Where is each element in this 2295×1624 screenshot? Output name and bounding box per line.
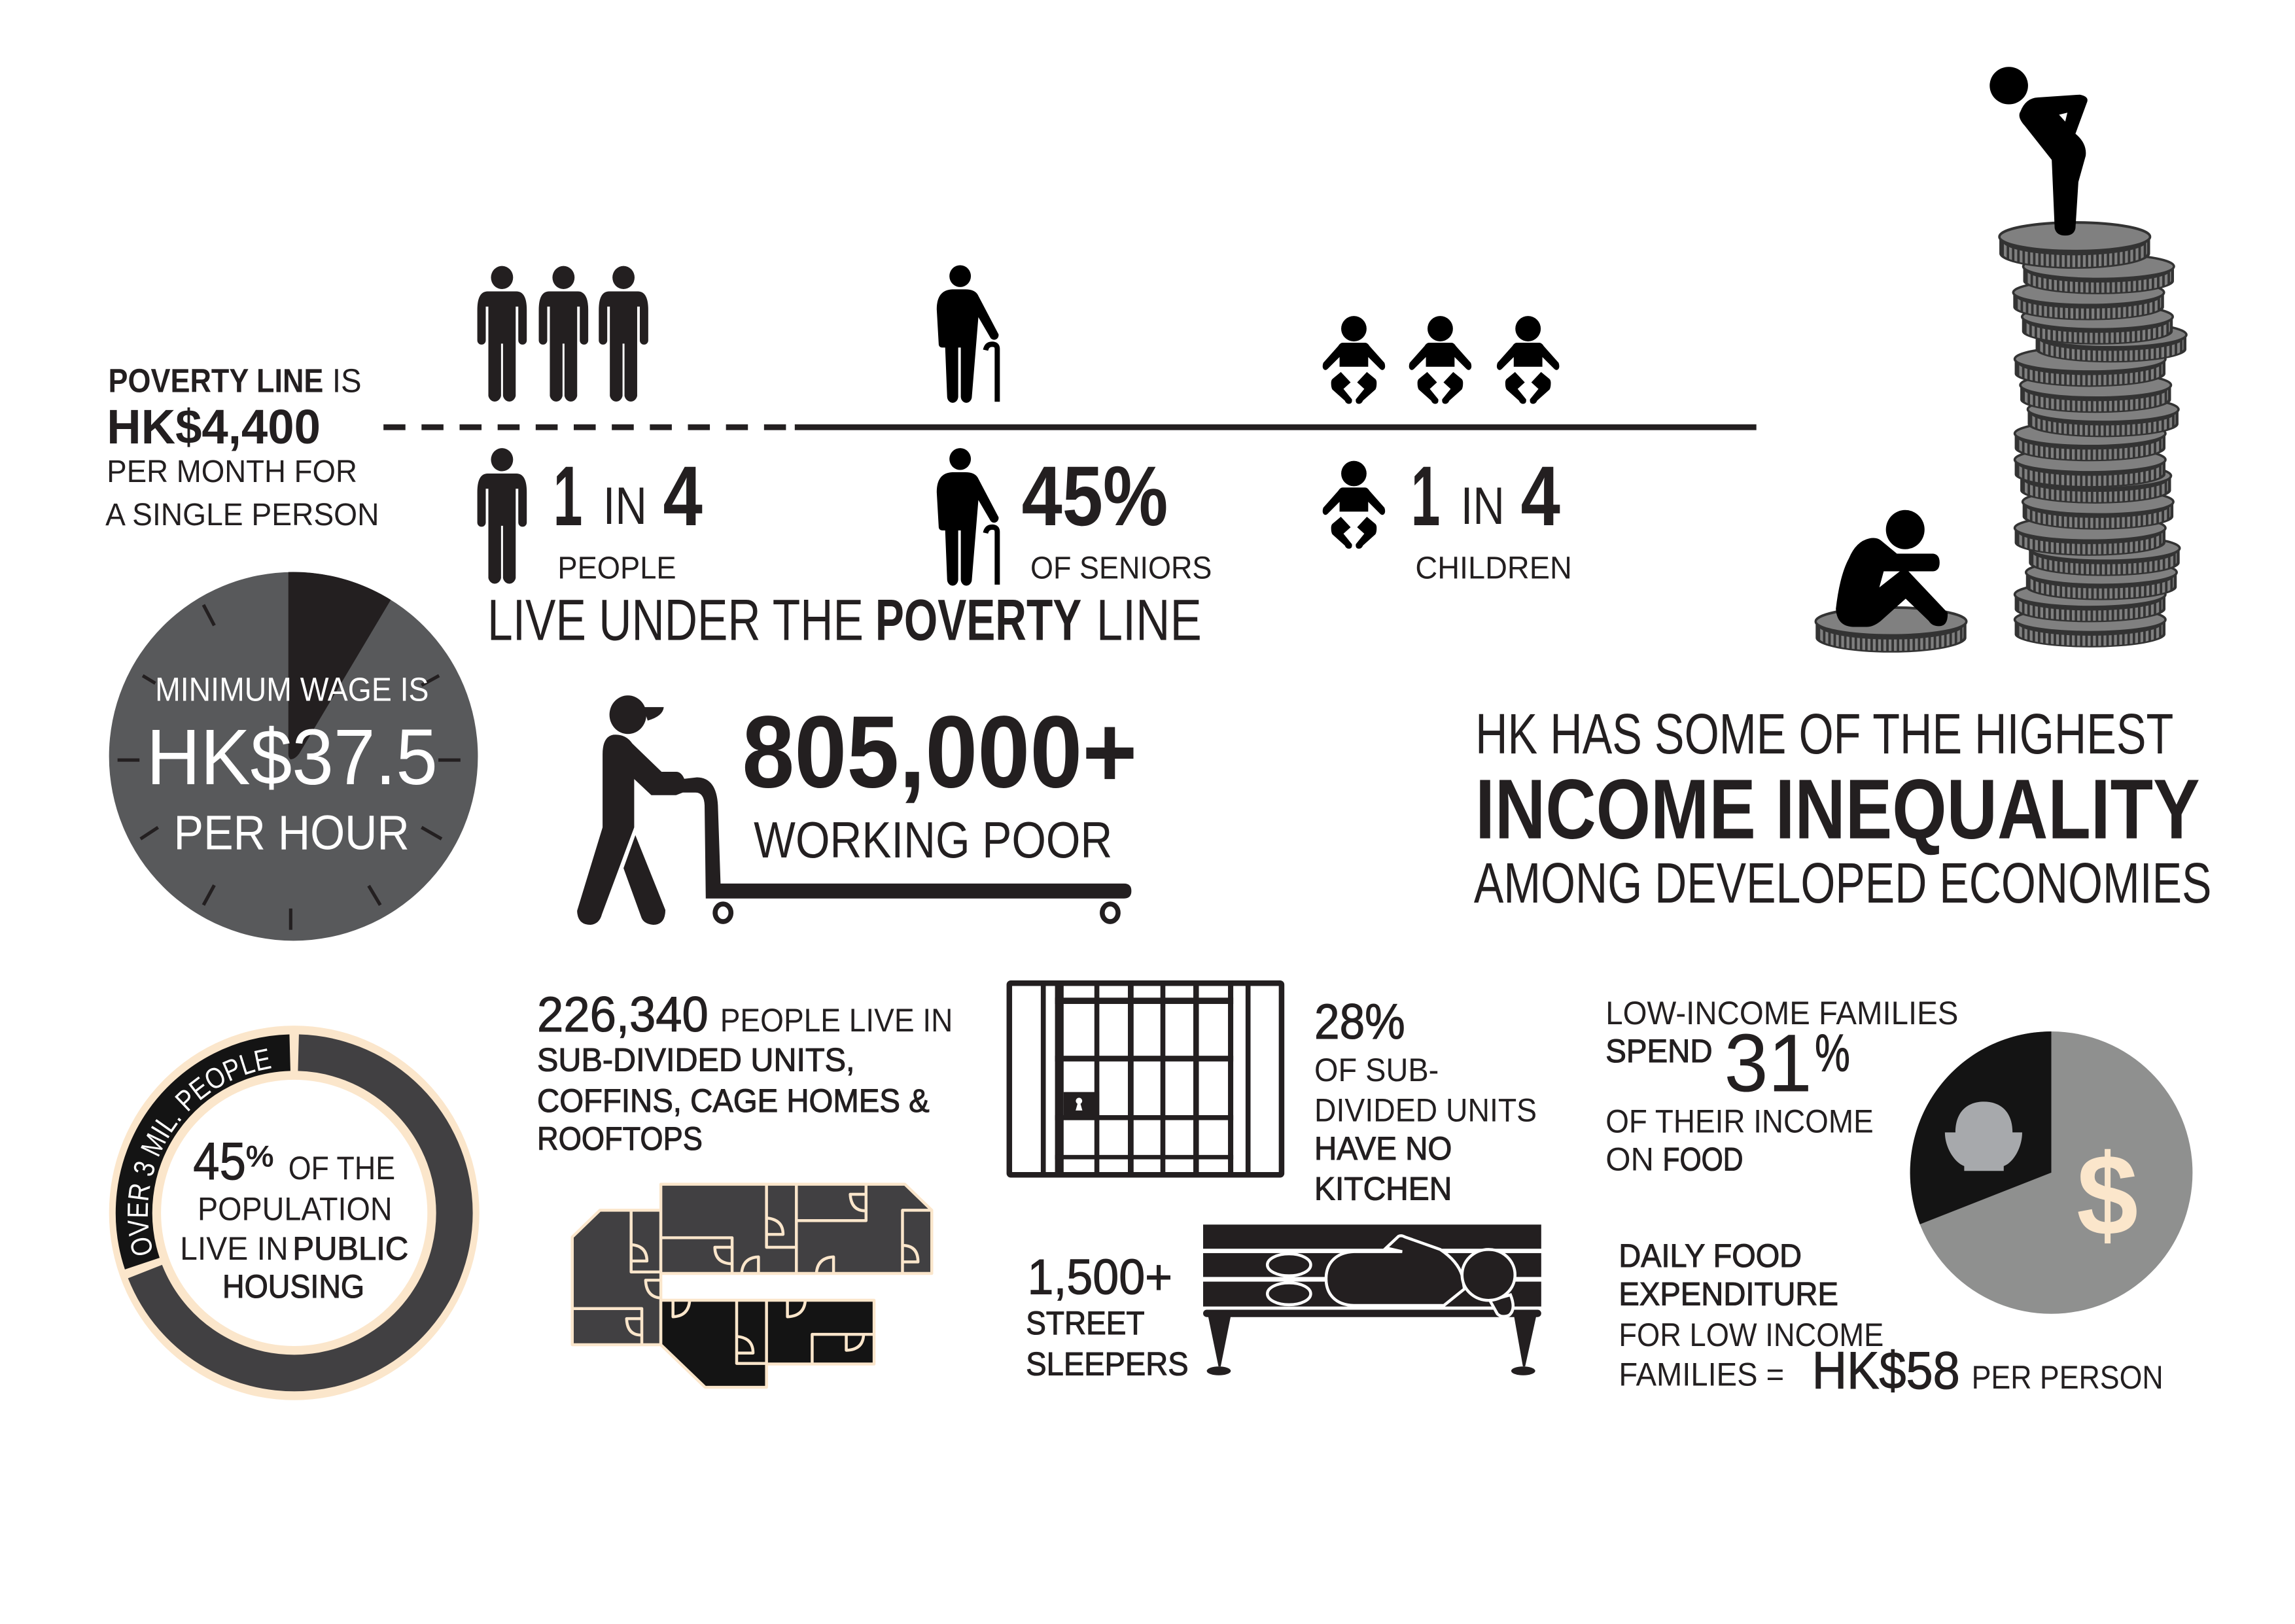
- pie chart: food share of income: [1910, 1031, 2192, 1314]
- text: share of income spent on food: LOW-INCOME FAMILIES: [1605, 994, 1958, 1031]
- text: street sleepers statistic: STREET: [1026, 1304, 1145, 1341]
- icon: three babies above the line: [1323, 316, 1559, 404]
- text: no kitchen statistic: KITCHEN: [1314, 1169, 1452, 1207]
- donut chart: public housing: 45: [193, 1132, 246, 1191]
- text: share of income spent on food: ON: [1605, 1141, 1654, 1178]
- text: no kitchen statistic: OF SUB-: [1314, 1051, 1439, 1088]
- statistic: 1 in 4 children: IN: [1461, 477, 1505, 536]
- donut chart: public housing: [109, 1026, 480, 1400]
- text: share of income spent on food: %: [1815, 1024, 1850, 1082]
- donut chart: public housing: OVER 3 MIL. PEOPLE: [128, 1048, 272, 1255]
- text: sub-divided units statistic: PEOPLE LIVE IN: [720, 1001, 953, 1039]
- statistic: 45% of seniors: 45%: [1022, 449, 1168, 544]
- donut chart: public housing: %: [246, 1140, 273, 1173]
- statistic: 1 in 4 children: CHILDREN: [1415, 551, 1572, 586]
- text: share of income spent on food: 31: [1724, 1018, 1812, 1109]
- clock: minimum wage: HK$37.5: [147, 713, 438, 801]
- text: no kitchen statistic: DIVIDED UNITS: [1314, 1092, 1537, 1129]
- text: daily food expenditure: FAMILIES =: [1619, 1355, 1784, 1392]
- floor plan: sub-divided flat: [572, 1184, 932, 1387]
- icon: person sleeping on a bench: [1203, 1224, 1541, 1375]
- text: no kitchen statistic: HAVE NO: [1314, 1130, 1452, 1167]
- donut chart: public housing: PUBLIC: [292, 1230, 408, 1267]
- text: sub-divided units statistic: SUB-DIVIDED UNITS,: [537, 1041, 855, 1078]
- statistic: 1 in 4 children: [1323, 449, 1572, 586]
- heading: live under the poverty line: LINE: [1096, 587, 1202, 653]
- text: daily food expenditure: HK$58: [1812, 1341, 1960, 1400]
- statistic: 1 in 4 people: IN: [603, 477, 647, 536]
- poverty line threshold text: [105, 362, 379, 532]
- clock: minimum wage: [109, 572, 478, 941]
- heading: live under the poverty line: [487, 587, 1202, 653]
- text: street sleepers statistic: SLEEPERS: [1026, 1345, 1189, 1383]
- text: no kitchen statistic: [1314, 994, 1537, 1207]
- icon: worker pushing a cart: [577, 695, 1131, 925]
- statistic: working poor: 805,000+: [742, 695, 1137, 809]
- illustration: single coin with poor figure: [1815, 510, 1967, 653]
- text: share of income spent on food: [1605, 994, 1958, 1178]
- donut chart: public housing: POPULATION: [198, 1190, 393, 1228]
- heading: live under the poverty line: LIVE UNDER THE: [487, 587, 864, 653]
- statistic: working poor: WORKING POOR: [754, 811, 1112, 869]
- text: sub-divided units statistic: 226,340: [537, 987, 709, 1043]
- text: street sleepers statistic: 1,500+: [1028, 1250, 1172, 1305]
- text: sub-divided units statistic: ROOFTOPS: [537, 1120, 703, 1157]
- statistic: 1 in 4 people: 1: [553, 449, 582, 544]
- text: no kitchen statistic: 28%: [1314, 994, 1405, 1050]
- statistic: 45% of seniors: [937, 448, 1212, 586]
- poverty line threshold text: PER MONTH FOR: [107, 454, 357, 489]
- clock: minimum wage: MINIMUM WAGE IS: [155, 670, 429, 708]
- heading: income inequality: [1474, 702, 2211, 915]
- poverty line threshold text: A SINGLE PERSON: [105, 497, 379, 532]
- text: daily food expenditure: PER PERSON: [1972, 1358, 2164, 1396]
- icon: three people above the line: [478, 266, 648, 402]
- pie chart: food share of income: $: [2076, 1131, 2138, 1260]
- text: share of income spent on food: SPEND: [1605, 1032, 1713, 1069]
- statistic: 1 in 4 people: [478, 448, 703, 586]
- donut chart: public housing: HOUSING: [222, 1268, 364, 1305]
- text: share of income spent on food: OF THEIR INCOME: [1605, 1102, 1874, 1139]
- statistic: 1 in 4 people: PEOPLE: [557, 551, 676, 586]
- poverty line threshold text: HK$4,400: [107, 400, 321, 454]
- statistic: 1 in 4 children: 1: [1411, 449, 1440, 544]
- text: daily food expenditure: DAILY FOOD: [1619, 1237, 1802, 1274]
- illustration: tall coin stack with rich figure: [1989, 67, 2186, 648]
- statistic: 1 in 4 people: 4: [663, 449, 703, 544]
- donut chart: public housing: LIVE IN: [180, 1230, 289, 1267]
- poverty line threshold text: POVERTY LINE: [109, 362, 323, 399]
- text: daily food expenditure: [1619, 1237, 2164, 1400]
- text: street sleepers statistic: [1026, 1250, 1189, 1383]
- icon: senior above the line: [937, 265, 998, 403]
- text: sub-divided units statistic: COFFINS, CAGE HOMES &: [537, 1082, 930, 1119]
- icon: cage door: [1009, 983, 1282, 1175]
- statistic: 45% of seniors: OF SENIORS: [1030, 551, 1212, 586]
- text: daily food expenditure: EXPENDITURE: [1619, 1275, 1838, 1312]
- poverty line threshold text: IS: [332, 362, 362, 399]
- text: sub-divided units statistic: [537, 987, 953, 1157]
- clock: minimum wage: PER HOUR: [174, 806, 410, 860]
- statistic: 1 in 4 children: 4: [1520, 449, 1560, 544]
- text: share of income spent on food: FOOD: [1663, 1141, 1743, 1178]
- text: daily food expenditure: FOR LOW INCOME: [1619, 1316, 1883, 1353]
- statistic: working poor: [742, 695, 1137, 869]
- heading: live under the poverty line: POVERTY: [875, 587, 1081, 653]
- poverty line divider: [383, 426, 1757, 428]
- donut chart: public housing: OF THE: [289, 1149, 395, 1186]
